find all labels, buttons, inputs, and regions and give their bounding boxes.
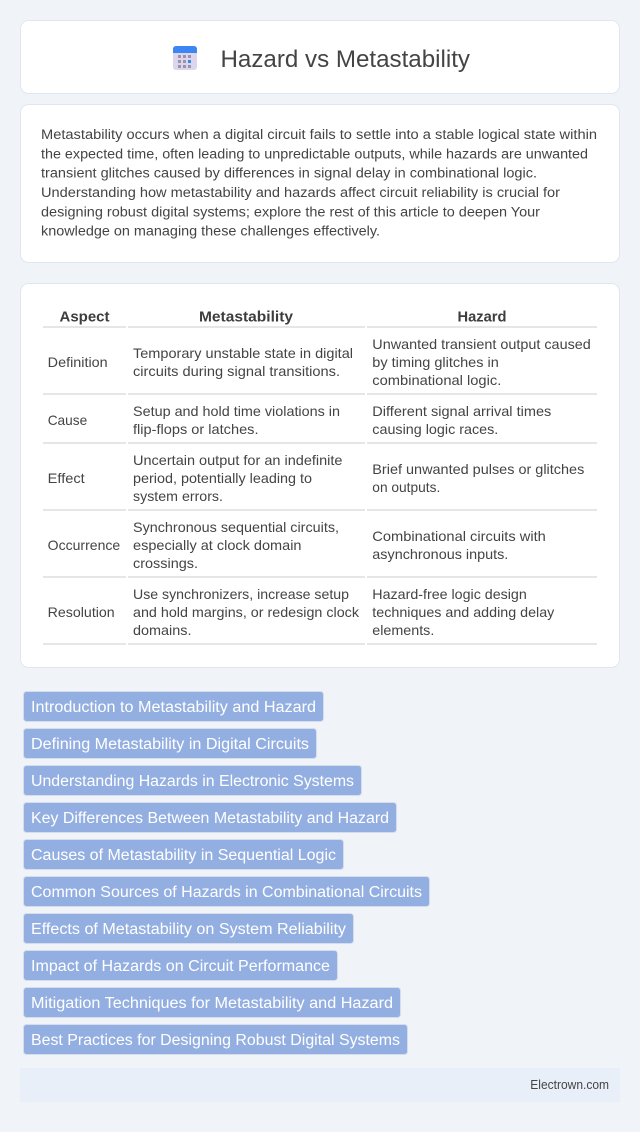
table row: definition: circuits during signal transitions. <box>133 363 340 379</box>
panel: header <box>20 20 620 94</box>
table row: occurrence: asynchronous inputs. <box>372 546 508 562</box>
section link 4: Key Differences Between Metastability and Hazard <box>31 810 389 827</box>
table header: Hazard <box>458 308 506 326</box>
table row: resolution: techniques and adding delay <box>372 604 554 620</box>
panel: comparison table <box>20 284 620 668</box>
table row: occurrence <box>48 519 546 571</box>
table row: cause: Setup and hold time violations in <box>133 403 340 419</box>
table row: resolution <box>48 586 554 638</box>
table row: effect: system errors. <box>133 488 223 504</box>
table row: effect: on outputs. <box>372 479 440 495</box>
footer <box>20 1068 620 1102</box>
text block: intro: knowledge on managing these challenges effectively. <box>41 224 380 240</box>
table row: definition: by timing glitches in <box>372 354 499 370</box>
section link 3 <box>24 766 362 796</box>
text block: intro: Understanding how metastability and hazards affect circuit reliability is crucial for <box>41 185 560 201</box>
table row: effect: period, potentially leading to <box>133 470 312 486</box>
text block: intro <box>41 127 597 240</box>
section link 7: Effects of Metastability on System Reliability <box>31 921 346 938</box>
text block: intro: Metastability occurs when a digital circuit fails to settle into a stable logical state within <box>41 127 597 143</box>
section link 3: Understanding Hazards in Electronic Systems <box>31 773 354 790</box>
table row: definition <box>48 336 591 388</box>
text block: intro: designing robust digital systems; explore the rest of this article to deepen Your <box>41 204 540 220</box>
section link 5: Causes of Metastability in Sequential Logic <box>31 847 336 864</box>
footer: Electrown.com <box>530 1077 609 1092</box>
table row: effect: Effect <box>48 470 85 486</box>
table row: occurrence: crossings. <box>133 555 198 571</box>
table row: definition: Temporary unstable state in digital <box>133 345 353 361</box>
table row: resolution: elements. <box>372 622 434 638</box>
table row: resolution: and hold margins, or redesign clock <box>133 604 360 620</box>
table row: occurrence: Synchronous sequential circuits, <box>133 519 339 535</box>
section link 8 <box>24 950 338 980</box>
table row: cause: causing logic races. <box>372 421 498 437</box>
section link 1: Introduction to Metastability and Hazard <box>31 699 316 716</box>
section link 10: Best Practices for Designing Robust Digital Systems <box>31 1032 400 1049</box>
table row: resolution: domains. <box>133 622 192 638</box>
table row: definition: combinational logic. <box>372 372 501 388</box>
section link 6: Common Sources of Hazards in Combinational Circuits <box>31 884 422 901</box>
table row: definition: Unwanted transient output caused <box>372 336 591 352</box>
table header: Aspect <box>60 308 110 326</box>
table row: cause <box>48 403 551 437</box>
section link 8: Impact of Hazards on Circuit Performance <box>31 958 330 975</box>
section link 2: Defining Metastability in Digital Circuits <box>31 736 309 753</box>
section link 10 <box>24 1024 408 1054</box>
section link 7 <box>24 914 354 944</box>
panel: intro paragraph <box>20 104 620 262</box>
section link 1 <box>24 692 324 722</box>
table row: occurrence: especially at clock domain <box>133 537 302 553</box>
table row: occurrence: Combinational circuits with <box>372 528 546 544</box>
section link 2 <box>24 728 316 758</box>
table row: cause: Different signal arrival times <box>372 403 551 419</box>
title: Hazard vs Metastability <box>220 46 470 73</box>
table row: effect: Brief unwanted pulses or glitches <box>372 461 584 477</box>
table header <box>60 308 506 326</box>
section link 9 <box>24 988 400 1018</box>
table row: definition: Definition <box>48 354 108 370</box>
table row: effect: Uncertain output for an indefinite <box>133 452 343 468</box>
table row: cause: Cause <box>48 412 87 428</box>
table row: effect <box>48 452 584 504</box>
section link 6 <box>24 876 430 906</box>
table header: Metastability <box>199 308 294 326</box>
table row: resolution: Hazard-free logic design <box>372 586 527 602</box>
table row: occurrence: Occurrence <box>48 537 120 553</box>
icon: calendar grid <box>173 46 197 70</box>
table row: cause: flip-flops or latches. <box>133 421 258 437</box>
text block: intro: the expected time, often leading to unpredictable outputs, while hazards are unwanted <box>41 146 588 162</box>
table row: resolution: Resolution <box>48 604 115 620</box>
table row: resolution: Use synchronizers, increase setup <box>133 586 349 602</box>
list: article sections <box>24 692 430 1054</box>
section link 5 <box>24 840 344 870</box>
section link 9: Mitigation Techniques for Metastability and Hazard <box>31 995 393 1012</box>
section link 4 <box>24 802 396 832</box>
text block: intro: transient glitches caused by differences in signal delay in combinational logic. <box>41 166 537 182</box>
